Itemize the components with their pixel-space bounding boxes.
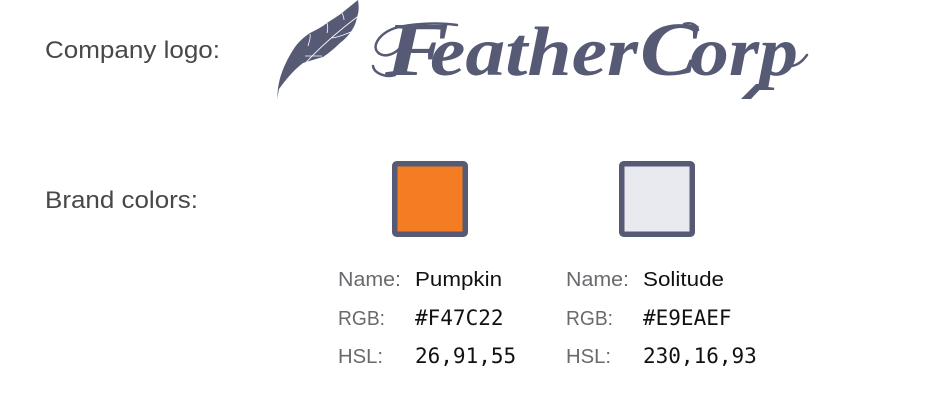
swatch: pumpkin <box>395 164 465 234</box>
details: pumpkin: 26,91,55 <box>415 344 516 368</box>
details: pumpkin: HSL: <box>338 346 383 368</box>
details: pumpkin: Pumpkin <box>415 269 502 291</box>
swatch: solitude <box>622 164 692 234</box>
details: solitude: RGB: <box>566 308 613 330</box>
logo: FeatherCorp <box>277 0 807 99</box>
details: pumpkin: #F47C22 <box>415 306 504 330</box>
details: solitude: Name: <box>566 269 629 291</box>
details: pumpkin: RGB: <box>338 308 385 330</box>
details: solitude <box>566 269 757 368</box>
details: solitude: 230,16,93 <box>643 344 757 368</box>
heading: company logo: Company logo: <box>45 37 220 64</box>
wordmark <box>384 8 798 92</box>
wordmark: eather <box>430 14 639 91</box>
logo flourishes <box>373 23 807 76</box>
heading: brand colors: Brand colors: <box>45 187 198 214</box>
details: solitude: #E9EAEF <box>643 306 732 330</box>
wordmark: C <box>640 8 699 92</box>
wordmark: F <box>384 8 449 92</box>
details: pumpkin <box>338 269 516 368</box>
p descender <box>741 84 765 99</box>
details: pumpkin: Name: <box>338 269 401 291</box>
wordmark: orp <box>690 14 798 91</box>
icon: feather <box>277 0 359 99</box>
details: solitude: Solitude <box>643 269 724 291</box>
details: solitude: HSL: <box>566 346 611 368</box>
